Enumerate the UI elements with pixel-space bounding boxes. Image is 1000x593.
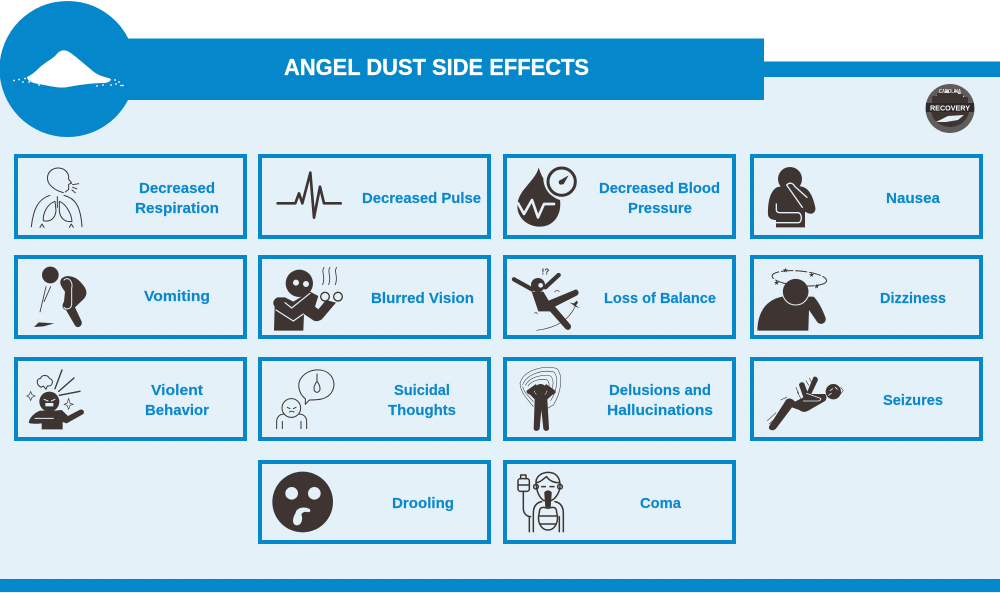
label: Violent xyxy=(151,382,203,399)
label: Dizziness xyxy=(880,290,946,307)
logo: Carolina Recovery seal: CAROLINA xyxy=(939,89,961,95)
icon: angry person xyxy=(27,370,84,429)
label: Hallucinations xyxy=(607,402,713,419)
icon: dizzy person with stars xyxy=(757,266,827,331)
label: Decreased Blood xyxy=(599,180,720,197)
label xyxy=(599,180,720,217)
icon: falling person: !? xyxy=(542,268,549,277)
label: Thoughts xyxy=(388,402,456,419)
card: Nausea xyxy=(752,156,981,237)
card: Blurred Vision xyxy=(260,257,489,337)
label: Pressure xyxy=(628,200,692,217)
footer bar xyxy=(0,579,1000,592)
label: Coma xyxy=(640,495,682,512)
icon: person with binoculars xyxy=(273,267,342,331)
label: Drooling xyxy=(392,495,454,512)
label: Blurred Vision xyxy=(371,290,474,307)
label: Respiration xyxy=(135,200,219,217)
label: Decreased Pulse xyxy=(362,190,481,207)
card: Decreased Respiration xyxy=(16,156,245,237)
label: Seizures xyxy=(883,392,943,409)
icon: dizzy person with stars: ★ xyxy=(814,283,820,291)
label xyxy=(388,382,456,419)
icon: nauseous person xyxy=(768,167,815,227)
icon: dizzy person with stars: ★ xyxy=(809,271,815,279)
logo: Carolina Recovery seal xyxy=(926,84,974,133)
icon: pulse line xyxy=(278,173,341,218)
label: Behavior xyxy=(145,402,209,419)
icon: powder pile in circle xyxy=(0,1,136,137)
icon: blood drop and gauge xyxy=(517,167,575,227)
card: Vomiting xyxy=(16,257,245,337)
icon: person holding head with spirals xyxy=(520,367,561,431)
card: Coma xyxy=(505,462,734,542)
icon: lungs and breath xyxy=(31,168,82,227)
card: Delusions and Hallucinations xyxy=(505,359,734,439)
card: Dizziness xyxy=(752,257,981,337)
icon: person seizing xyxy=(767,377,843,430)
label xyxy=(135,180,219,217)
title banner xyxy=(120,38,764,100)
label: Loss of Balance xyxy=(604,290,716,307)
label: Delusions and xyxy=(609,382,711,399)
label xyxy=(607,382,713,419)
icon: vomiting person xyxy=(34,267,86,327)
card: Suicidal Thoughts xyxy=(260,359,489,439)
card: Decreased Blood Pressure xyxy=(505,156,734,237)
card: Seizures xyxy=(752,359,981,439)
logo: Carolina Recovery seal: RECOVERY xyxy=(930,106,970,112)
card: Violent Behavior xyxy=(16,359,245,439)
top right band xyxy=(764,62,1000,77)
label: Nausea xyxy=(886,190,941,207)
icon: dizzy person with stars: ★ xyxy=(774,279,780,287)
label: Decreased xyxy=(139,180,215,197)
card: Decreased Pulse xyxy=(260,156,489,237)
label xyxy=(145,382,209,419)
icon: dizzy person with stars: ★ xyxy=(782,266,788,274)
card: Drooling xyxy=(260,462,489,542)
icon: drooling face xyxy=(272,472,333,532)
icon: patient with oxygen mask and IV xyxy=(518,472,563,532)
icon: falling person xyxy=(514,268,579,330)
label: Vomiting xyxy=(144,288,210,305)
label: Suicidal xyxy=(394,382,450,399)
icon: sad person with thought bubble xyxy=(277,370,334,429)
title: ANGEL DUST SIDE EFFECTS xyxy=(284,54,589,80)
card: Loss of Balance xyxy=(505,257,734,337)
